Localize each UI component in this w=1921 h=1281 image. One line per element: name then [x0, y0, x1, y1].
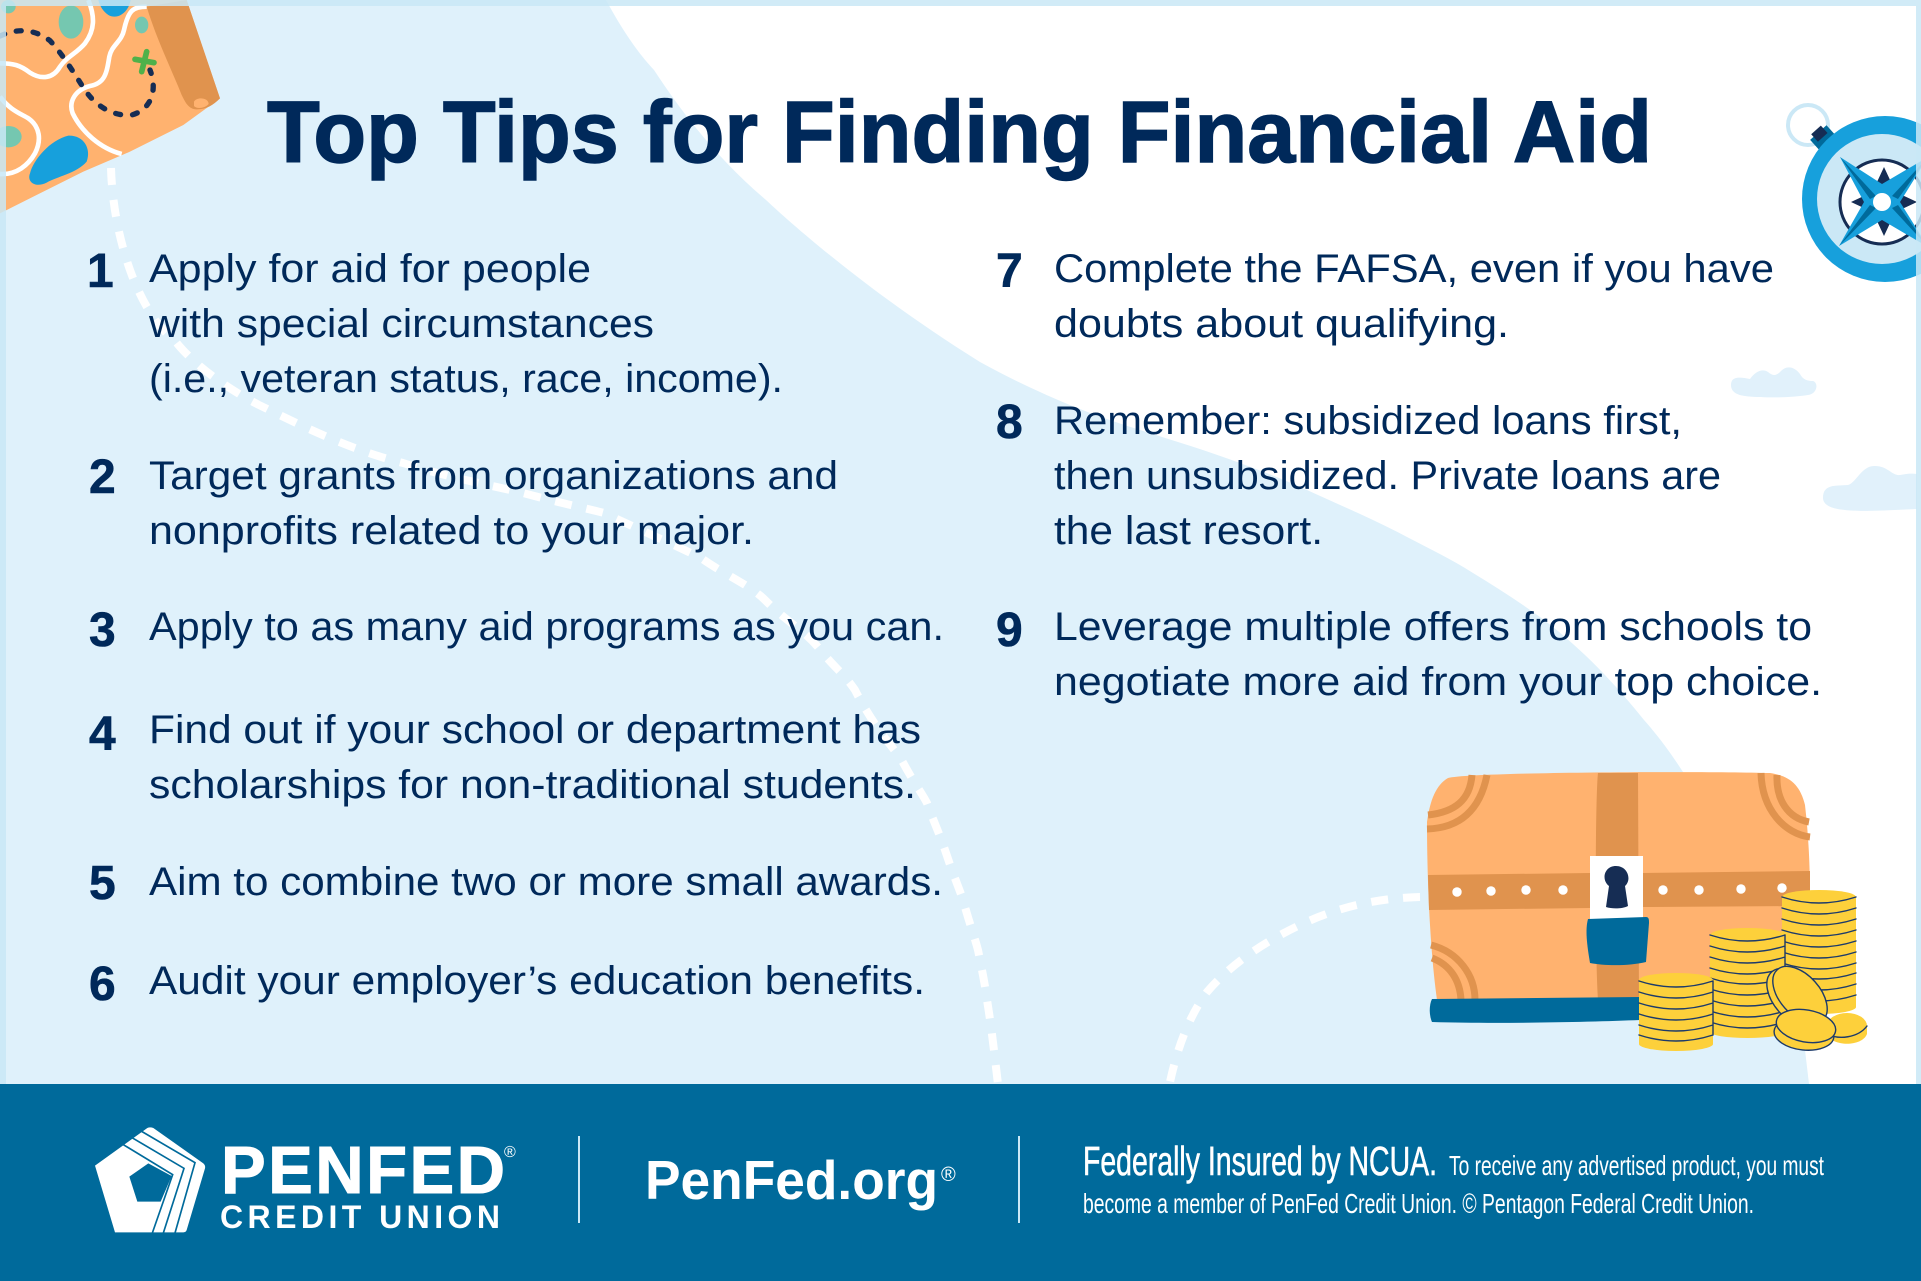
footer band [0, 1084, 1921, 1281]
illustration: gold coin stacks [1639, 890, 1867, 1053]
tip 1 [87, 245, 783, 401]
tip 2: 2 [89, 451, 116, 504]
website: ® [941, 1164, 956, 1186]
tip 3: Apply to as many aid programs as you can. [149, 605, 944, 649]
tip 2: nonprofits related to your major. [149, 509, 754, 553]
website: PenFed.org [645, 1149, 938, 1211]
tip 8: then unsubsidized. Private loans are [1054, 454, 1721, 498]
tip 7: doubts about qualifying. [1054, 302, 1509, 346]
tip 8 [996, 396, 1721, 553]
tip 2 [89, 451, 838, 553]
illustration: compass [1788, 105, 1921, 282]
tip 8: Remember: subsidized loans first, [1054, 399, 1682, 443]
tip 1: 1 [87, 245, 114, 298]
logo: PenFed pentagon mark [95, 1127, 205, 1233]
background: light blue curved panel [0, 0, 1809, 1084]
tip 4: Find out if your school or department has [149, 708, 921, 752]
tip 9 [996, 604, 1822, 704]
dashed trail from the map [111, 168, 998, 1084]
divider [1018, 1136, 1020, 1223]
tip 2: Target grants from organizations and [149, 454, 838, 498]
tip 7: Complete the FAFSA, even if you have [1054, 247, 1774, 291]
logo wordmark: ® [504, 1144, 516, 1161]
title: Top Tips for Finding Financial Aid [267, 84, 1652, 181]
tip 4: 4 [89, 708, 116, 761]
tip 3: 3 [89, 604, 116, 657]
tip 9: Leverage multiple offers from schools to [1054, 605, 1812, 649]
illustration: treasure chest [1427, 772, 1810, 1023]
tip 9: negotiate more aid from your top choice. [1054, 660, 1822, 704]
tip 8: 8 [996, 396, 1023, 449]
tip 1: with special circumstances [148, 302, 654, 346]
tip 7 [996, 245, 1774, 346]
tip 1: Apply for aid for people [149, 247, 591, 291]
tip 4 [89, 708, 921, 807]
tip 6: 6 [89, 958, 116, 1011]
disclaimer [1083, 1138, 1824, 1219]
tip 5: 5 [89, 857, 116, 910]
illustration: clouds [1731, 367, 1917, 511]
tip 9: 9 [996, 604, 1023, 657]
logo wordmark: PENFED [221, 1133, 505, 1208]
tip 8: the last resort. [1054, 509, 1323, 553]
tip 6: Audit your employer’s education benefits. [149, 959, 925, 1003]
tip 5: Aim to combine two or more small awards. [149, 860, 943, 904]
disclaimer: Federally Insured by NCUA. [1083, 1138, 1437, 1184]
logo wordmark: CREDIT UNION [220, 1199, 500, 1235]
divider [578, 1136, 580, 1223]
tip 4: scholarships for non-traditional students. [149, 763, 916, 807]
tip 7: 7 [996, 245, 1023, 298]
tip 1: (i.e., veteran status, race, income). [149, 357, 783, 401]
dashed trail to the chest [1170, 897, 1420, 1082]
illustration: treasure map [0, 0, 220, 213]
